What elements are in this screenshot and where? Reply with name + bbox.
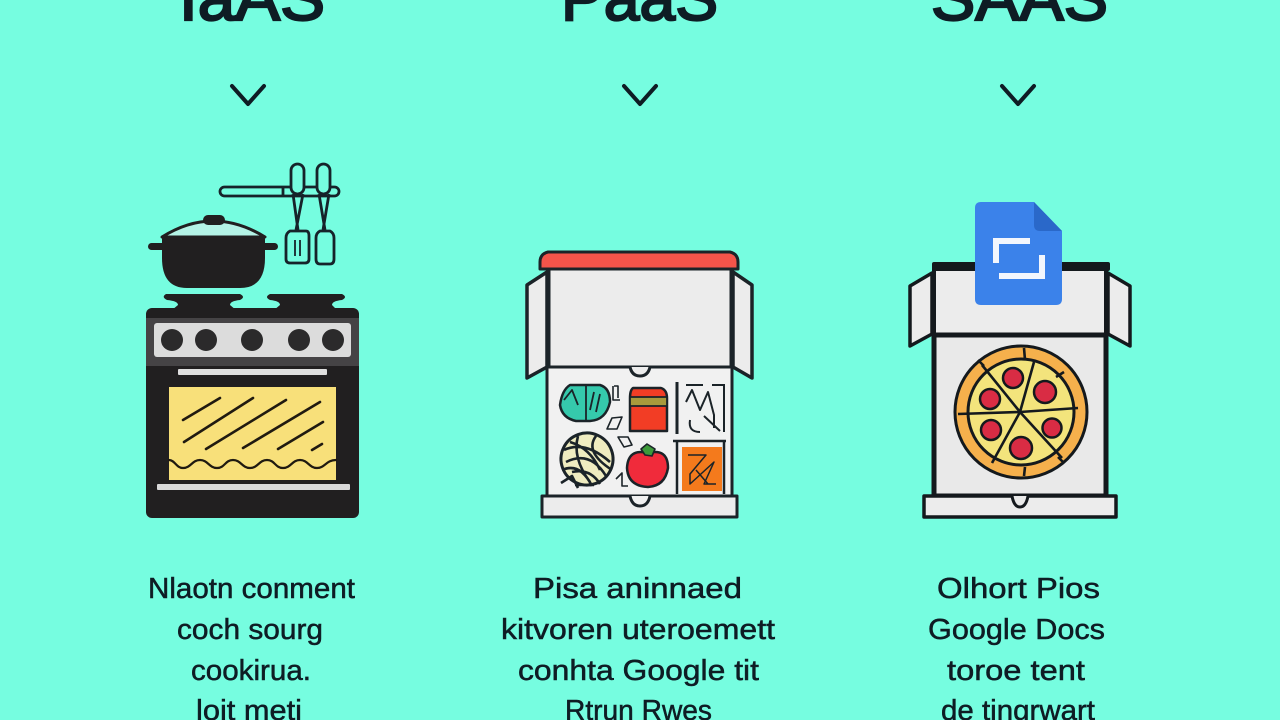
box lid bbox=[549, 268, 731, 367]
column: SaaS bbox=[910, 0, 1130, 720]
icon: oven bbox=[146, 294, 359, 518]
icon: Google Docs file bbox=[975, 202, 1062, 305]
icon: open meal-kit box bbox=[527, 252, 752, 517]
oven window bbox=[169, 387, 336, 480]
right flap bbox=[733, 272, 752, 378]
text: PaaS description: conhta Google tit bbox=[518, 655, 759, 687]
column: IaaS bbox=[146, 0, 359, 720]
arrow: IaaS chevron bbox=[232, 86, 264, 104]
text: PaaS description: kitvoren uteroemett bbox=[501, 614, 775, 646]
icon: cooking pot bbox=[148, 215, 278, 288]
burners bbox=[164, 294, 243, 310]
lid notch bbox=[630, 367, 650, 376]
left flap bbox=[910, 273, 932, 346]
front notch bbox=[1012, 496, 1028, 507]
text: SaaS description bbox=[928, 573, 1105, 720]
pizza bbox=[955, 346, 1087, 478]
arrow: PaaS chevron bbox=[624, 86, 656, 104]
oven body bbox=[146, 308, 359, 518]
ingredient: small labels bbox=[607, 386, 632, 486]
ingredient: sketch panel bbox=[677, 382, 725, 434]
box base bbox=[934, 335, 1106, 496]
lid red edge bbox=[540, 252, 738, 269]
ingredient: tomato bbox=[627, 444, 668, 487]
text: PaaS description: Pisa aninnaed bbox=[533, 573, 742, 605]
text: SaaS description: Google Docs bbox=[928, 614, 1105, 646]
ingredient: pasta nest bbox=[552, 424, 622, 494]
arrow: SaaS chevron bbox=[1002, 86, 1034, 104]
front notch bbox=[630, 496, 650, 506]
text: IaaS description: coch sourg bbox=[177, 614, 323, 646]
left flap bbox=[527, 272, 547, 378]
lid bbox=[934, 268, 1106, 335]
right flap bbox=[1108, 273, 1130, 346]
text: IaaS description bbox=[148, 573, 355, 720]
icon: utensils bbox=[220, 164, 339, 264]
text: PaaS description bbox=[501, 573, 775, 720]
text: IaaS description: cookirua. bbox=[191, 655, 311, 687]
ingredient: jar bbox=[630, 388, 667, 431]
ingredient: teal pouch bbox=[560, 384, 610, 421]
text: IaaS description: Nlaotn conment bbox=[148, 573, 355, 605]
knobs bbox=[161, 329, 344, 351]
pepperoni bbox=[980, 368, 1062, 459]
box front bbox=[924, 496, 1116, 517]
control panel bbox=[154, 323, 351, 357]
lid top bar bbox=[932, 262, 1110, 271]
icon: pizza box bbox=[910, 262, 1130, 517]
window shine lines bbox=[169, 398, 336, 468]
lower rack bbox=[157, 484, 350, 490]
oven handle bbox=[178, 369, 327, 375]
control band bbox=[146, 318, 359, 366]
text: SaaS description: toroe tent bbox=[947, 655, 1085, 687]
box base bbox=[547, 367, 732, 496]
box front bbox=[542, 496, 737, 517]
text: SaaS description: Olhort Pios bbox=[937, 573, 1100, 605]
column: PaaS bbox=[501, 0, 775, 720]
ingredient: orange pack bbox=[673, 441, 726, 494]
